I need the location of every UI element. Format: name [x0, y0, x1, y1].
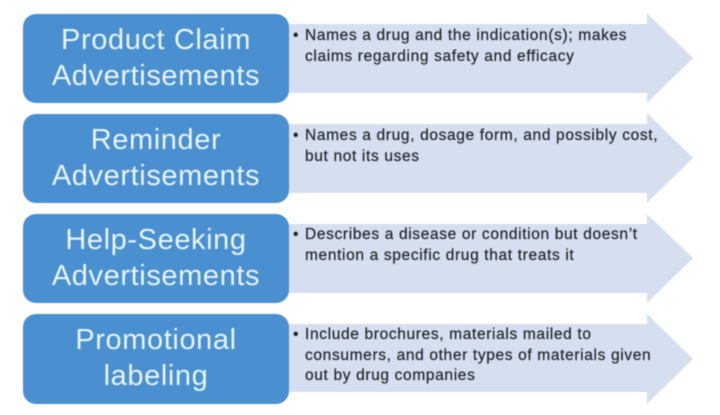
box: Promotional labeling	[23, 314, 289, 404]
arrow 1	[288, 13, 693, 103]
text: product claim description: claims regarding safety and efficacy	[305, 48, 575, 65]
text: promotional labeling description	[292, 326, 651, 384]
box: Product Claim Advertisements: Advertisements	[52, 60, 260, 92]
box: Help-Seeking Advertisements: Advertisements	[52, 260, 260, 292]
text: promotional labeling description: Include brochures, materials mailed to	[305, 326, 592, 343]
text: reminder description: •	[293, 127, 299, 144]
text: help-seeking description: Describes a disease or condition but doesn’t	[305, 226, 638, 243]
text: reminder description: Names a drug, dosage form, and possibly cost,	[305, 127, 658, 144]
text: product claim description: Names a drug and the indication(s); makes	[305, 27, 627, 44]
box: Help-Seeking Advertisements	[23, 214, 289, 303]
arrow 4	[288, 314, 693, 404]
text: help-seeking description	[292, 226, 638, 264]
text: help-seeking description: •	[293, 226, 299, 243]
text: product claim description: •	[293, 27, 299, 44]
box: Reminder Advertisements: Reminder	[91, 124, 221, 156]
text: help-seeking description: mention a specific drug that treats it	[305, 247, 574, 264]
text: product claim description	[292, 27, 627, 66]
box: Product Claim Advertisements	[23, 14, 289, 103]
text: promotional labeling description: out by drug companies	[305, 367, 475, 384]
box: Help-Seeking Advertisements: Help-Seeking	[65, 224, 247, 256]
text: reminder description	[292, 127, 658, 165]
text: reminder description: but not its uses	[305, 148, 420, 165]
box: Reminder Advertisements: Advertisements	[52, 160, 260, 192]
text: promotional labeling description: •	[293, 326, 299, 343]
box: Promotional labeling: labeling	[104, 360, 208, 392]
box: Promotional labeling: Promotional	[75, 324, 237, 356]
text: promotional labeling description: consumers, and other types of materials given	[305, 347, 651, 364]
box: Product Claim Advertisements: Product Claim	[61, 24, 251, 56]
arrow 2	[288, 113, 693, 203]
box: Reminder Advertisements	[23, 114, 289, 203]
arrow 3	[288, 214, 693, 303]
